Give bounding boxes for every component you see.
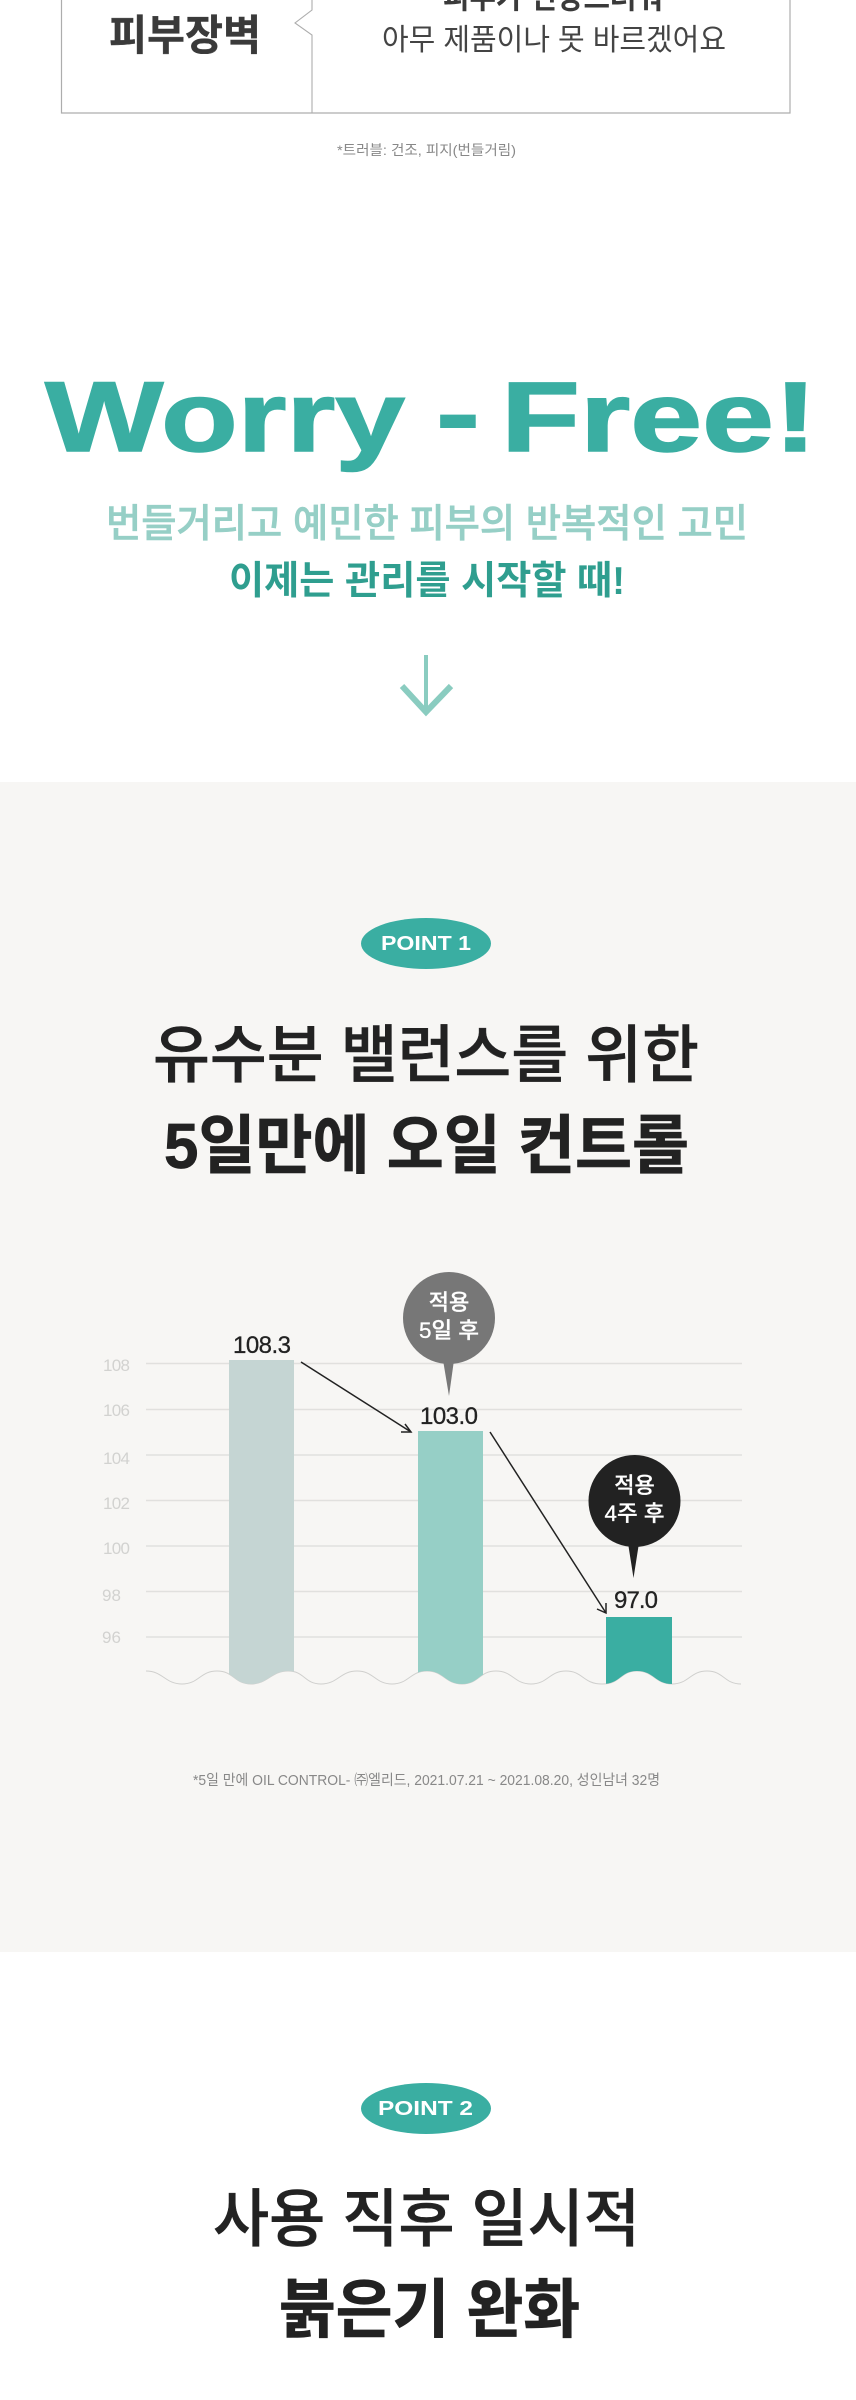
y axis labels: 104 bbox=[103, 1449, 130, 1468]
badge: POINT 2 bbox=[361, 2083, 491, 2134]
bar: baseline 108.3: 108.3 bbox=[233, 1332, 291, 1359]
footnote: study details: *5일 만에 OIL CONTROL- ㈜엘리드, 2021.07.21 ~ 2021.08.20, 성인남녀 32명 bbox=[193, 1772, 660, 1789]
title: Worry - Free!: Worry bbox=[45, 361, 405, 472]
callout: after 4 weeks bbox=[588, 1455, 680, 1578]
callout: after 4 weeks: 적용 bbox=[614, 1473, 655, 1498]
title: Worry - Free! bbox=[45, 357, 817, 472]
arrow: down bbox=[402, 655, 451, 712]
bar: 5 days 103.0 bbox=[418, 1403, 483, 1690]
subheading: repeated concern: 번들거리고 예민한 피부의 반복적인 고민 bbox=[106, 503, 748, 546]
footnote: trouble definition: *트러블: 건조, 피지(번들거림) bbox=[337, 142, 516, 158]
y axis labels: 102 bbox=[103, 1494, 130, 1513]
heading: point 1: 5일만에 오일 컨트롤 bbox=[164, 1110, 689, 1182]
y axis labels: 106 bbox=[103, 1401, 130, 1420]
badge: POINT 2: POINT 2 bbox=[378, 2098, 473, 2120]
panel: point 1 background bbox=[0, 782, 856, 1952]
subheading: time to start care: 이제는 관리를 시작할 때! bbox=[229, 560, 625, 603]
title: Worry - Free!: - bbox=[436, 357, 480, 468]
heading: point 2: 붉은기 완화 bbox=[279, 2274, 580, 2346]
row heading: skin barrier: 피부장벽 bbox=[109, 12, 261, 59]
bar: baseline 108.3 bbox=[229, 1332, 294, 1690]
callout: after 5 days bbox=[403, 1272, 495, 1396]
callout: after 5 days: 5일 후 bbox=[419, 1318, 479, 1343]
y axis labels: 100 bbox=[103, 1539, 130, 1558]
bar: 4 weeks 97.0: 97.0 bbox=[614, 1587, 658, 1614]
heading: point 1 bbox=[153, 1021, 699, 1182]
badge: POINT 1: POINT 1 bbox=[381, 933, 471, 955]
callout: after 5 days: 적용 bbox=[429, 1290, 469, 1315]
bar chart: oil control bbox=[102, 1272, 742, 1690]
title: Worry - Free!: Free! bbox=[501, 361, 817, 472]
badge: POINT 1 bbox=[361, 918, 491, 969]
heading: point 1: 유수분 밸런스를 위한 bbox=[153, 1021, 699, 1091]
panel: skin barrier table bbox=[62, 0, 790, 113]
arrow: 108.3 to 103.0 bbox=[301, 1362, 411, 1432]
arrow: 103.0 to 97.0 bbox=[490, 1432, 606, 1613]
heading: point 2 bbox=[213, 2185, 640, 2346]
y axis labels: 108 bbox=[103, 1356, 130, 1375]
y axis labels: 96 bbox=[102, 1628, 121, 1647]
callout: after 4 weeks: 4주 후 bbox=[604, 1501, 664, 1526]
y axis labels bbox=[102, 1356, 130, 1647]
heading: point 2: 사용 직후 일시적 bbox=[213, 2185, 640, 2255]
bar: 5 days 103.0: 103.0 bbox=[420, 1403, 478, 1430]
row text: cannot apply products: 아무 제품이나 못 바르겠어요 bbox=[382, 24, 726, 57]
bar: 4 weeks 97.0 bbox=[606, 1587, 672, 1690]
y axis labels: 98 bbox=[102, 1586, 121, 1605]
